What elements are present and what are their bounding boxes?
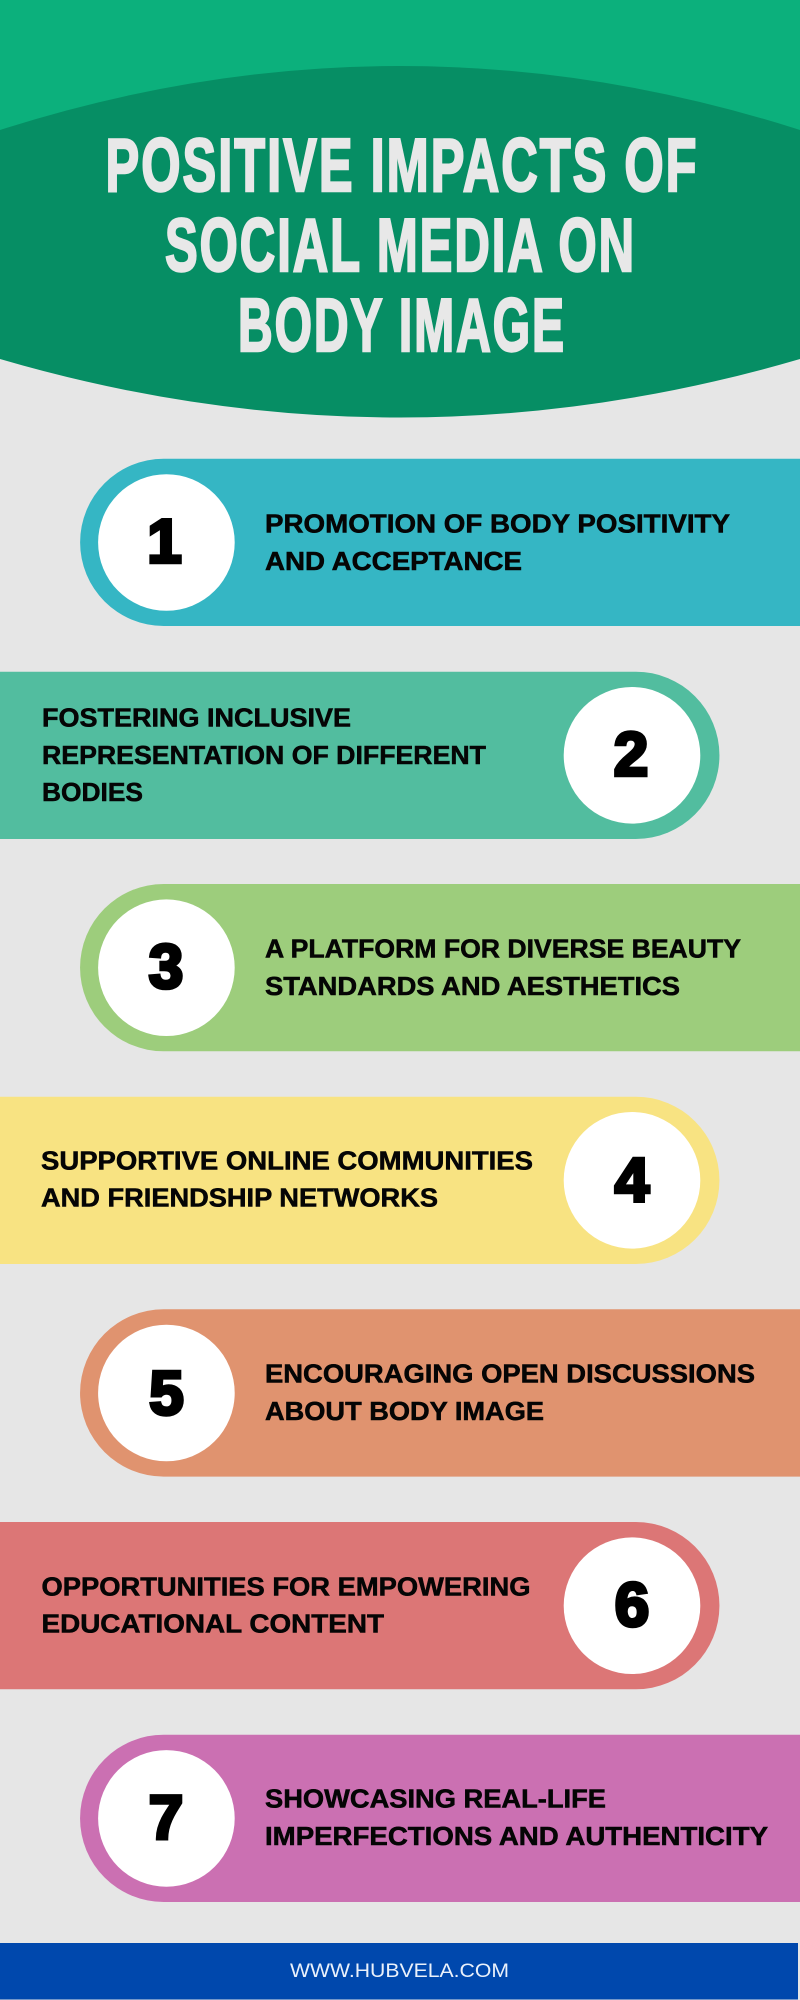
number badge 7: 7 bbox=[149, 1784, 183, 1853]
title: BODY IMAGE bbox=[238, 283, 566, 367]
number badge 7 bbox=[98, 1750, 235, 1887]
number badge 2: 2 bbox=[614, 720, 648, 790]
text: item 5: ENCOURAGING OPEN DISCUSSIONS bbox=[265, 1359, 755, 1389]
text: item 7: SHOWCASING REAL-LIFE bbox=[265, 1784, 606, 1814]
number badge 1 bbox=[98, 474, 235, 611]
number badge 6: 6 bbox=[615, 1571, 649, 1640]
text: item 7 bbox=[265, 1784, 768, 1851]
header banner bbox=[0, 0, 800, 418]
number badge 3: 3 bbox=[149, 933, 183, 1002]
panel: item 2 bbox=[0, 672, 719, 839]
text: item 2 bbox=[42, 703, 486, 807]
number badge 1: 1 bbox=[147, 508, 182, 576]
text: item 2: FOSTERING INCLUSIVE bbox=[42, 703, 351, 733]
title bbox=[106, 123, 698, 367]
panel: item 5 bbox=[80, 1309, 800, 1477]
text: item 3: STANDARDS AND AESTHETICS bbox=[265, 971, 680, 1001]
number badge 4 bbox=[564, 1112, 700, 1249]
text: item 3 bbox=[265, 934, 741, 1001]
panel: item 6 bbox=[0, 1522, 719, 1689]
footer bar bbox=[0, 1943, 798, 2000]
number badge 3 bbox=[98, 899, 235, 1036]
text: item 6: OPPORTUNITIES FOR EMPOWERING bbox=[42, 1572, 530, 1602]
text: item 6 bbox=[42, 1572, 530, 1639]
footer url: WWW.HUBVELA.COM bbox=[290, 1960, 509, 1982]
number badge 5: 5 bbox=[149, 1360, 184, 1428]
panel: item 7 bbox=[80, 1735, 800, 1902]
number badge 2 bbox=[564, 687, 700, 824]
header curved shape bbox=[0, 66, 800, 418]
number badge 4: 4 bbox=[615, 1146, 650, 1215]
text: item 2: BODIES bbox=[42, 777, 143, 807]
text: item 5 bbox=[265, 1359, 755, 1426]
text: item 7: IMPERFECTIONS AND AUTHENTICITY bbox=[265, 1821, 768, 1851]
text: item 3: A PLATFORM FOR DIVERSE BEAUTY bbox=[265, 934, 741, 964]
text: item 1 bbox=[265, 509, 730, 576]
text: item 5: ABOUT BODY IMAGE bbox=[265, 1396, 544, 1426]
panel: item 1 bbox=[80, 459, 800, 626]
number badge 6 bbox=[564, 1537, 700, 1674]
number badge 5 bbox=[98, 1325, 235, 1461]
panel: item 3 bbox=[80, 884, 800, 1051]
text: item 4: AND FRIENDSHIP NETWORKS bbox=[41, 1183, 438, 1213]
text: item 6: EDUCATIONAL CONTENT bbox=[42, 1609, 384, 1639]
text: item 4: SUPPORTIVE ONLINE COMMUNITIES bbox=[41, 1146, 533, 1176]
panel: item 4 bbox=[0, 1097, 719, 1264]
text: item 2: REPRESENTATION OF DIFFERENT bbox=[42, 740, 486, 770]
text: item 4 bbox=[41, 1146, 533, 1213]
text: item 1: PROMOTION OF BODY POSITIVITY bbox=[265, 509, 730, 539]
text: item 1: AND ACCEPTANCE bbox=[265, 546, 522, 576]
